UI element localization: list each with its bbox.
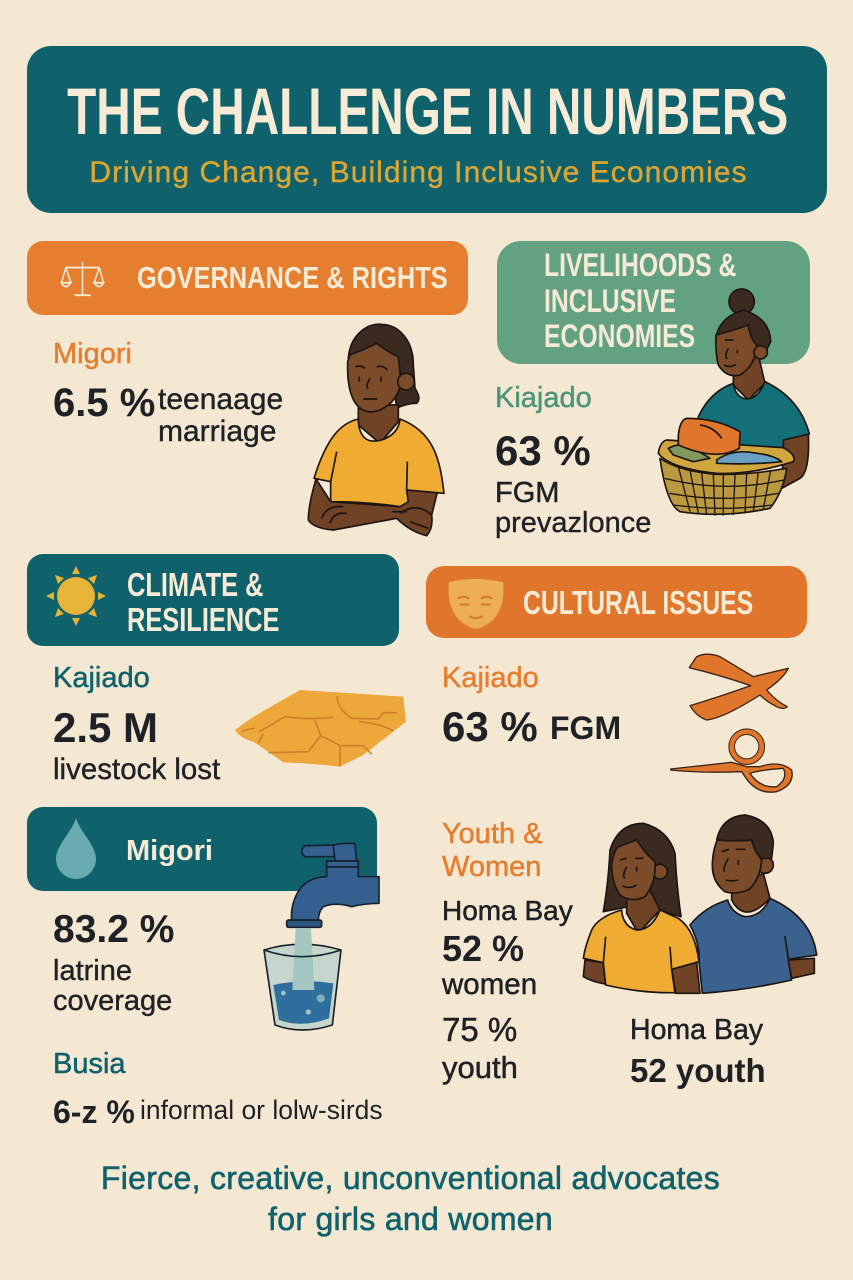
text: Migori teenage marriage: 6.5 %	[53, 381, 155, 425]
panel: livelihoods header	[497, 241, 810, 364]
text: Migori teenage marriage	[53, 338, 283, 448]
basket body	[660, 458, 787, 514]
text: Busia informal: 6-z %	[53, 1094, 135, 1130]
text: latrine coverage	[53, 908, 174, 1017]
heading: CLIMATE &	[127, 566, 263, 603]
heading: INCLUSIVE	[544, 282, 676, 318]
panel: climate header	[27, 554, 399, 646]
panel: water header	[27, 807, 377, 891]
text: Kajiado livestock lost: livestock lost	[53, 753, 220, 786]
text: Homa Bay 52 youth: 52 youth	[630, 1052, 766, 1089]
icon: water drop	[56, 818, 96, 879]
footer tagline: for girls and women	[268, 1201, 553, 1237]
text: Kiajado FGM prevalence: FGM	[495, 477, 559, 509]
text: youth and women: youth	[442, 1050, 518, 1085]
arm	[782, 434, 809, 488]
text: Migori teenage marriage: marriage	[158, 415, 276, 448]
text: latrine coverage: 83.2 %	[53, 908, 174, 951]
heading: ECONOMIES	[544, 318, 695, 354]
neck	[358, 405, 398, 443]
text: latrine coverage: coverage	[53, 985, 172, 1017]
arms	[308, 479, 437, 536]
text: Homa Bay 52 youth	[630, 1014, 766, 1089]
heading	[127, 566, 279, 638]
text: Kajiado FGM: Kajiado	[442, 662, 539, 694]
blades	[689, 654, 788, 720]
text: Kajiado livestock lost	[53, 662, 220, 786]
illustration: woman with basket	[658, 288, 810, 516]
shirt	[314, 419, 444, 507]
text: Kajiado FGM: FGM	[550, 710, 621, 746]
panel: cultural issues header	[426, 566, 807, 638]
heading: GOVERNANCE & RIGHTS	[137, 260, 448, 295]
shirt	[697, 382, 809, 452]
neck	[733, 355, 765, 400]
text: Busia informal	[53, 1048, 383, 1130]
text: Migori teenage marriage: Migori	[53, 338, 132, 370]
icon: mask	[448, 578, 504, 629]
face	[716, 325, 757, 376]
text: Homa Bay 52 youth: Homa Bay	[630, 1014, 763, 1046]
icon: scissors pair	[670, 654, 793, 793]
text: youth and women: Youth &	[442, 818, 543, 850]
lower scissors	[732, 732, 762, 762]
woman	[583, 823, 700, 993]
orange box	[678, 418, 740, 454]
subtitle: Driving Change, Building Inclusive Economies	[89, 156, 748, 189]
hair	[348, 324, 419, 408]
title: THE CHALLENGE IN NUMBERS	[67, 74, 788, 148]
hair and bun	[729, 289, 754, 314]
text: Kajiado livestock lost: 2.5 M	[53, 704, 158, 751]
footer tagline: Fierce, creative, unconventional advocates	[101, 1160, 720, 1196]
clothes	[668, 445, 710, 462]
text: Busia informal: informal or lolw-sirds	[140, 1095, 383, 1125]
text: youth and women	[442, 818, 573, 1085]
text: youth and women: 52 %	[442, 928, 524, 969]
text: Busia informal: Busia	[53, 1048, 126, 1080]
icon: sun	[46, 566, 106, 626]
footer tagline	[101, 1160, 720, 1237]
text: youth and women: 75 %	[442, 1011, 517, 1048]
text: youth and women: women	[442, 968, 537, 1001]
illustration: girl in yellow shirt	[308, 323, 445, 536]
text: Migori teenage marriage: teenaage	[158, 383, 283, 416]
heading: LIVELIHOODS &	[544, 247, 736, 283]
text: youth and women: Homa Bay	[442, 895, 573, 926]
title banner	[27, 46, 827, 213]
heading: RESILIENCE	[127, 601, 279, 638]
glass	[264, 944, 341, 1030]
text: Kajiado livestock lost: Kajiado	[53, 662, 150, 694]
basket rim	[658, 440, 794, 474]
heading: Migori	[126, 835, 213, 867]
text: Kiajado FGM prevalence: 63 %	[495, 427, 591, 474]
text: Kajiado FGM	[442, 662, 621, 750]
text: Kiajado FGM prevalence: Kiajado	[495, 382, 592, 414]
icon: cracked earth	[235, 690, 406, 767]
heading	[544, 247, 736, 354]
heading: CULTURAL ISSUES	[523, 584, 753, 621]
face	[348, 343, 401, 412]
text: latrine coverage: latrine	[53, 955, 132, 987]
man	[690, 815, 817, 993]
text: youth and women: Women	[442, 851, 541, 883]
text: Kiajado FGM prevalence: prevazlonce	[495, 507, 651, 539]
icon: tap and glass	[263, 842, 380, 1031]
text: Kajiado FGM: 63 %	[442, 703, 538, 750]
text: Kiajado FGM prevalence	[495, 382, 651, 539]
icon: scales	[60, 262, 105, 296]
tap	[302, 845, 335, 857]
panel: governance and rights header	[27, 241, 468, 315]
illustration: two young people	[582, 814, 818, 994]
